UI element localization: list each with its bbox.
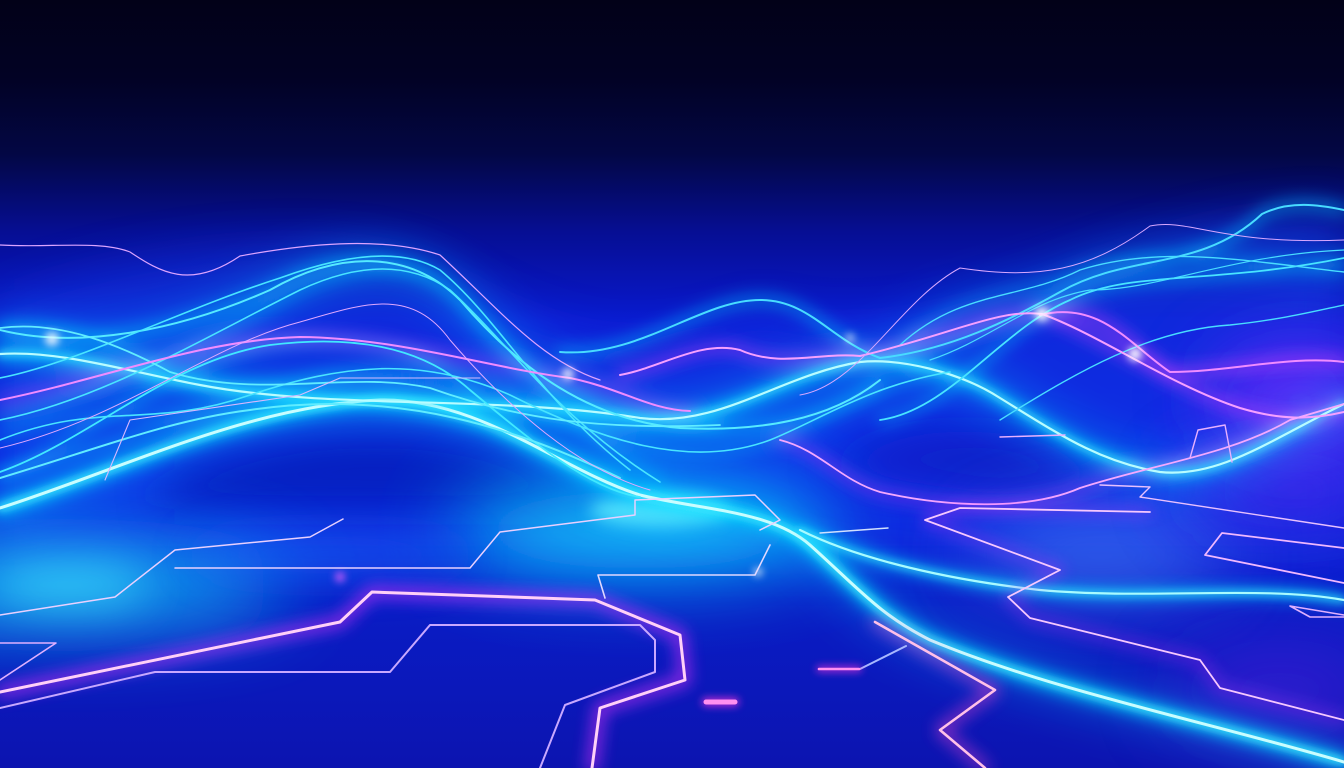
wave lines: wide haze: [0, 256, 1344, 762]
right side trace: [1205, 533, 1344, 583]
light sparks: [45, 307, 1142, 582]
cyan secondary waves: [0, 205, 1344, 497]
upper left trace: [105, 378, 480, 480]
centre right stub: [820, 528, 888, 533]
pink trace bottom centre: [875, 622, 995, 768]
thin trace to centre: [175, 495, 780, 568]
cyan lower right wave: [800, 530, 1344, 600]
bottom right stub: [1290, 606, 1344, 617]
pink waves: [0, 312, 1344, 504]
circuit traces: [0, 378, 1344, 768]
pink glowing trace right: [925, 508, 1344, 720]
pink dash: [706, 698, 735, 706]
wave lines: wide glow: [0, 205, 1344, 762]
cyan main wave: [0, 400, 1344, 762]
small corner trace: [0, 643, 56, 680]
pink dash: [819, 666, 859, 672]
centre branch: [598, 545, 770, 598]
cyan mid wave: [0, 354, 1344, 473]
wave lines: bright core: [0, 205, 1344, 762]
pink glowing trace left: [0, 592, 685, 768]
right angular stub: [1000, 425, 1232, 462]
colour glows on the ground: [0, 350, 1344, 730]
background wave hills: [0, 210, 1344, 560]
upper right trace: [1100, 485, 1344, 528]
thin trace lower left: [0, 625, 655, 768]
short link: [860, 646, 906, 669]
thin trace mid left: [0, 519, 343, 615]
thin lilac waves: [0, 225, 1344, 490]
